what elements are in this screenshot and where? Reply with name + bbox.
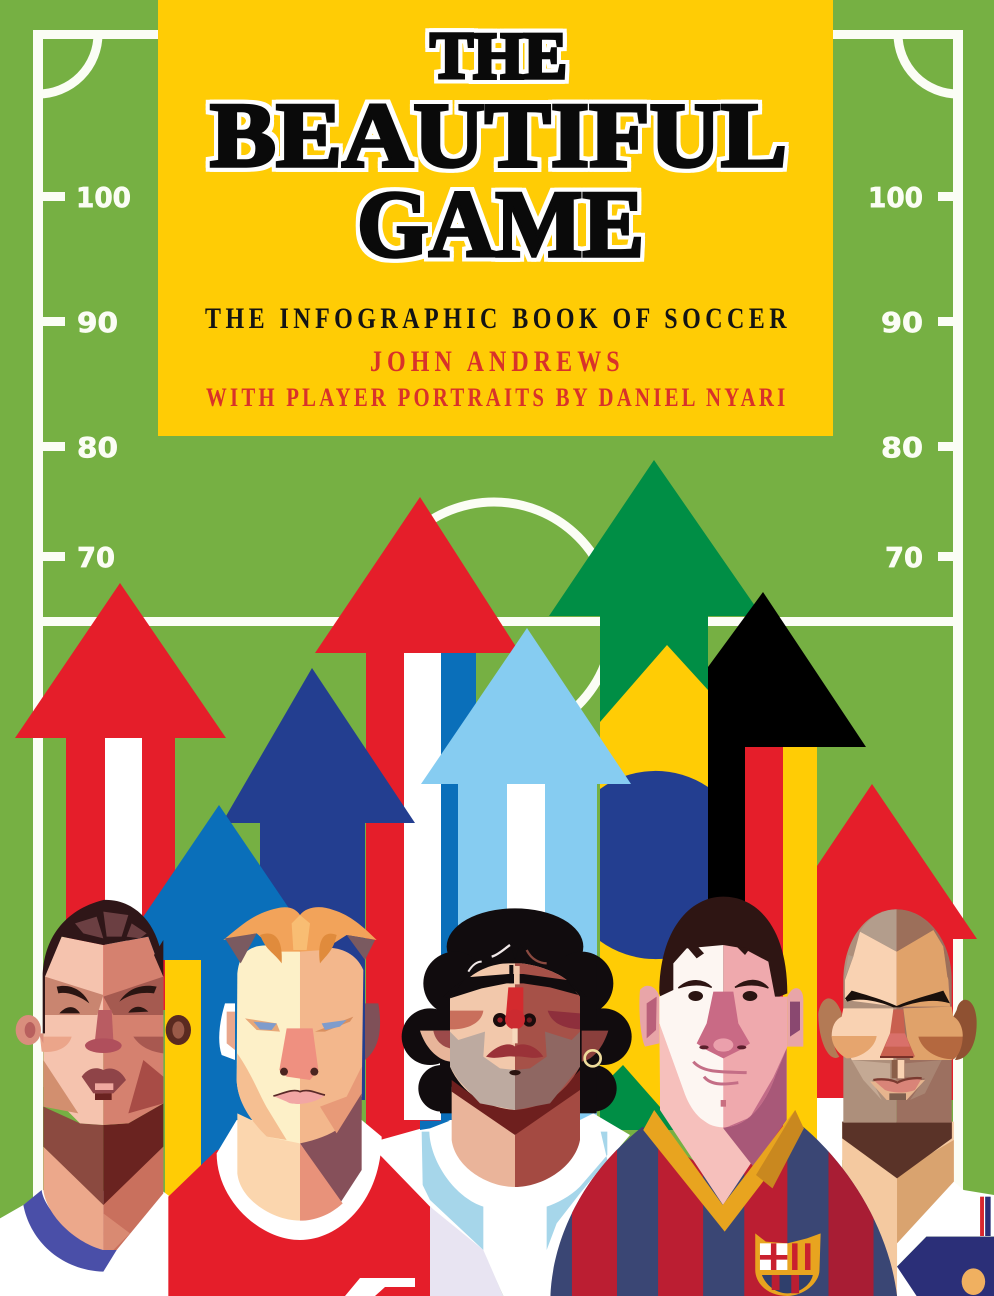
- arrow: mid blue: [114, 805, 324, 1200]
- player: ronaldo: [0, 900, 191, 1296]
- yard numbers right: [868, 181, 923, 574]
- arrow: france: [817, 784, 977, 1160]
- illustrator credit: WITH PLAYER PORTRAITS BY DANIEL NYARI: [206, 384, 785, 413]
- zidane head: [818, 909, 977, 1123]
- heading: the beautiful game: [210, 19, 787, 277]
- heading: the beautiful game: THE: [430, 19, 567, 93]
- player: zidane: [818, 909, 994, 1296]
- arrow: brazil: [549, 460, 762, 1130]
- heading: the beautiful game: BEAUTIFUL: [210, 84, 787, 186]
- author: JOHN ANDREWS: [370, 344, 620, 378]
- player: maradona: [380, 908, 632, 1296]
- yard numbers left: 80: [77, 431, 118, 464]
- arrow: portugal left: [15, 583, 226, 1018]
- arrow: germany: [708, 592, 866, 1160]
- jersey: barcelona stripes: [548, 1113, 899, 1296]
- yard numbers left: 70: [77, 541, 115, 574]
- collar: [643, 1110, 804, 1232]
- zidane neck and shirt: [819, 1122, 994, 1296]
- subtitle: THE INFOGRAPHIC BOOK OF SOCCER: [205, 301, 787, 335]
- arrow: dark blue: [222, 668, 415, 1100]
- heading: the beautiful game: GAME: [357, 171, 644, 277]
- hair, neck and face: [402, 908, 632, 1187]
- argentina shirt: [380, 1113, 630, 1296]
- yard numbers left: 100: [76, 181, 131, 214]
- yard numbers right: 100: [868, 181, 923, 214]
- head: [639, 897, 803, 1129]
- player: bergkamp: [168, 907, 433, 1296]
- jersey crest: arsenal cannon: [345, 1278, 415, 1296]
- crest: barcelona: [755, 1233, 821, 1296]
- yard numbers right: 80: [881, 431, 923, 464]
- yard numbers left: [76, 181, 131, 574]
- title panel: [158, 0, 833, 436]
- arrow: netherlands: [315, 497, 520, 1180]
- yard numbers left: 90: [77, 306, 118, 339]
- player: messi: [548, 897, 899, 1296]
- yard numbers right: 90: [881, 306, 923, 339]
- yard numbers right: 70: [885, 541, 923, 574]
- neck: [660, 1023, 787, 1205]
- arrow: argentina: [421, 628, 631, 1135]
